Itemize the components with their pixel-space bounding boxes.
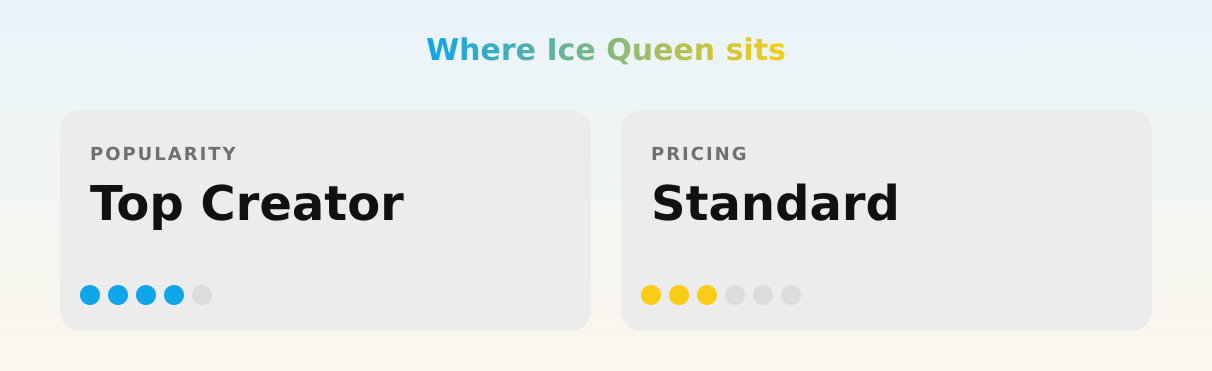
title: Where Ice Queen sits — [426, 32, 786, 68]
popularity value: Top Creator — [90, 176, 404, 232]
pricing label: PRICING — [651, 144, 748, 164]
panel: popularity — [60, 110, 591, 331]
panel: pricing — [621, 110, 1152, 331]
pricing value: Standard — [651, 176, 900, 232]
pricing rating dots — [641, 285, 801, 305]
popularity rating dots — [80, 285, 212, 305]
popularity label: POPULARITY — [90, 144, 238, 164]
